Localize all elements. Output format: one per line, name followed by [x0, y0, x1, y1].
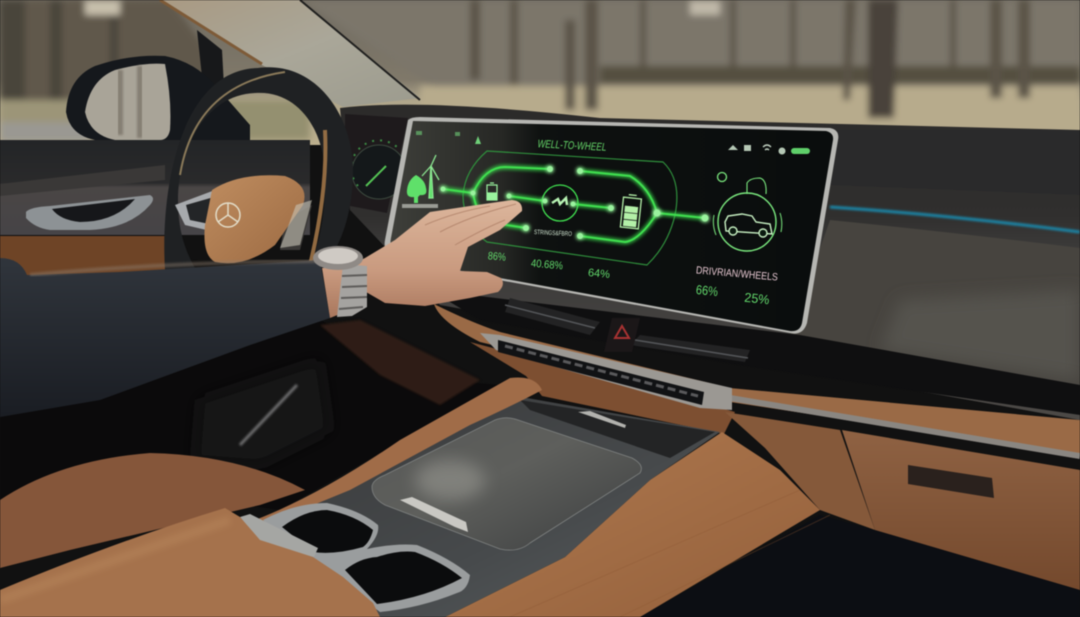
watch — [313, 246, 367, 317]
steering wheel hub — [204, 175, 305, 263]
left footwell — [0, 320, 500, 510]
steering wheel — [164, 67, 353, 270]
armrest — [0, 508, 380, 617]
touchscreen bezel — [385, 117, 838, 334]
console upper tan rail — [255, 378, 542, 526]
console lid — [372, 418, 641, 550]
outdoor background seen through windows — [0, 0, 1080, 145]
center console tan side — [445, 432, 830, 617]
title: WELL-TO-WHEEL — [537, 138, 607, 154]
left seat — [0, 453, 305, 568]
top-left status glyphs — [402, 131, 481, 208]
instrument cluster — [345, 114, 408, 213]
hazard button — [604, 318, 640, 352]
lower right tan dash trim — [434, 304, 1080, 590]
icon: center drivetrain — [552, 198, 567, 205]
icon: tree and wind turbine — [407, 155, 439, 203]
energy flow diagram — [443, 151, 705, 265]
icon: vehicle in circle — [713, 172, 782, 251]
footwell right — [640, 515, 1080, 617]
cup holders — [240, 503, 470, 612]
chrome armrest bracket — [240, 514, 318, 557]
stat: 66%: 66% — [695, 282, 719, 299]
silver control strip — [480, 333, 732, 410]
touchscreen panel — [390, 121, 833, 331]
window pillar post — [197, 30, 225, 105]
icon: small battery — [487, 183, 497, 200]
arm with sweater sleeve — [0, 258, 330, 417]
hand touching the screen — [322, 200, 522, 318]
lower dash shadow and vents — [430, 290, 1080, 415]
lid handle — [400, 497, 468, 532]
dashboard right section — [340, 105, 1080, 420]
stat: 64%: 64% — [587, 267, 611, 281]
A-pillar and headliner — [160, 0, 420, 107]
flow nodes — [440, 166, 708, 239]
door lower panel — [195, 360, 330, 465]
stat: 25%: 25% — [744, 290, 771, 307]
center console metal tray — [255, 378, 720, 617]
icon: star emblem — [216, 203, 240, 227]
glovebox handle — [908, 465, 994, 498]
status icons — [728, 145, 810, 154]
door handle — [26, 195, 153, 230]
side mirror — [66, 56, 250, 140]
label: storage: STRINGS&FBRO — [534, 229, 572, 238]
label: drivetrain wheels: DRIVRIAN/WHEELS — [696, 264, 778, 284]
icon: large battery — [620, 194, 642, 229]
upper slot handle — [578, 411, 626, 428]
stat: 86%: 86% — [487, 250, 507, 264]
stat: 40.68%: 40.68% — [530, 258, 564, 272]
lower door brown trim — [320, 320, 480, 405]
door panel — [0, 140, 310, 276]
